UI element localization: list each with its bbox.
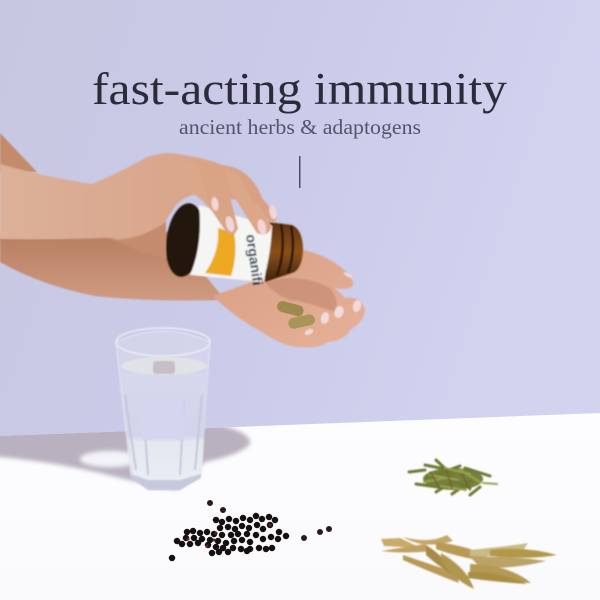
neck ridges (277, 224, 293, 276)
white table (0, 413, 600, 600)
arm in back top-left (0, 133, 37, 172)
capsules in palm (276, 300, 316, 330)
dried olive leaves (381, 535, 557, 589)
vertical divider line (299, 156, 300, 188)
bottle body dark base (162, 201, 208, 279)
orange label band (205, 228, 235, 276)
water column (120, 372, 208, 488)
lower forearm (0, 232, 225, 300)
glass facets (125, 395, 202, 475)
green dried herb pile (409, 460, 497, 495)
wall background (0, 0, 600, 440)
finger 1 (176, 164, 222, 213)
bottle (162, 201, 303, 286)
palm crease shading (265, 278, 337, 312)
subtitle: ancient herbs & adaptogens (179, 115, 421, 139)
finger 4 (240, 170, 277, 222)
finger 2 (200, 161, 238, 235)
shadow under hand (110, 222, 166, 258)
brand name on label: organifi (243, 233, 266, 286)
upper arm and hand gripping bottle (0, 153, 278, 258)
open palm with fingers (213, 248, 365, 347)
glass shadow on table (0, 424, 250, 490)
glass of water (116, 328, 210, 490)
forearm and back of hand (0, 153, 277, 258)
water surface (121, 357, 207, 375)
bottle neck amber glass (265, 222, 303, 282)
arm behind, lower arm and open hand (0, 232, 365, 347)
glass rim (116, 328, 210, 356)
finger 3 (224, 168, 272, 234)
white label (190, 205, 272, 282)
glass body (116, 331, 210, 490)
fingernails upper hand (211, 197, 278, 236)
black elderberries (172, 503, 329, 558)
title: fast-acting immunity (92, 64, 508, 114)
fingernails lower hand (304, 271, 362, 336)
